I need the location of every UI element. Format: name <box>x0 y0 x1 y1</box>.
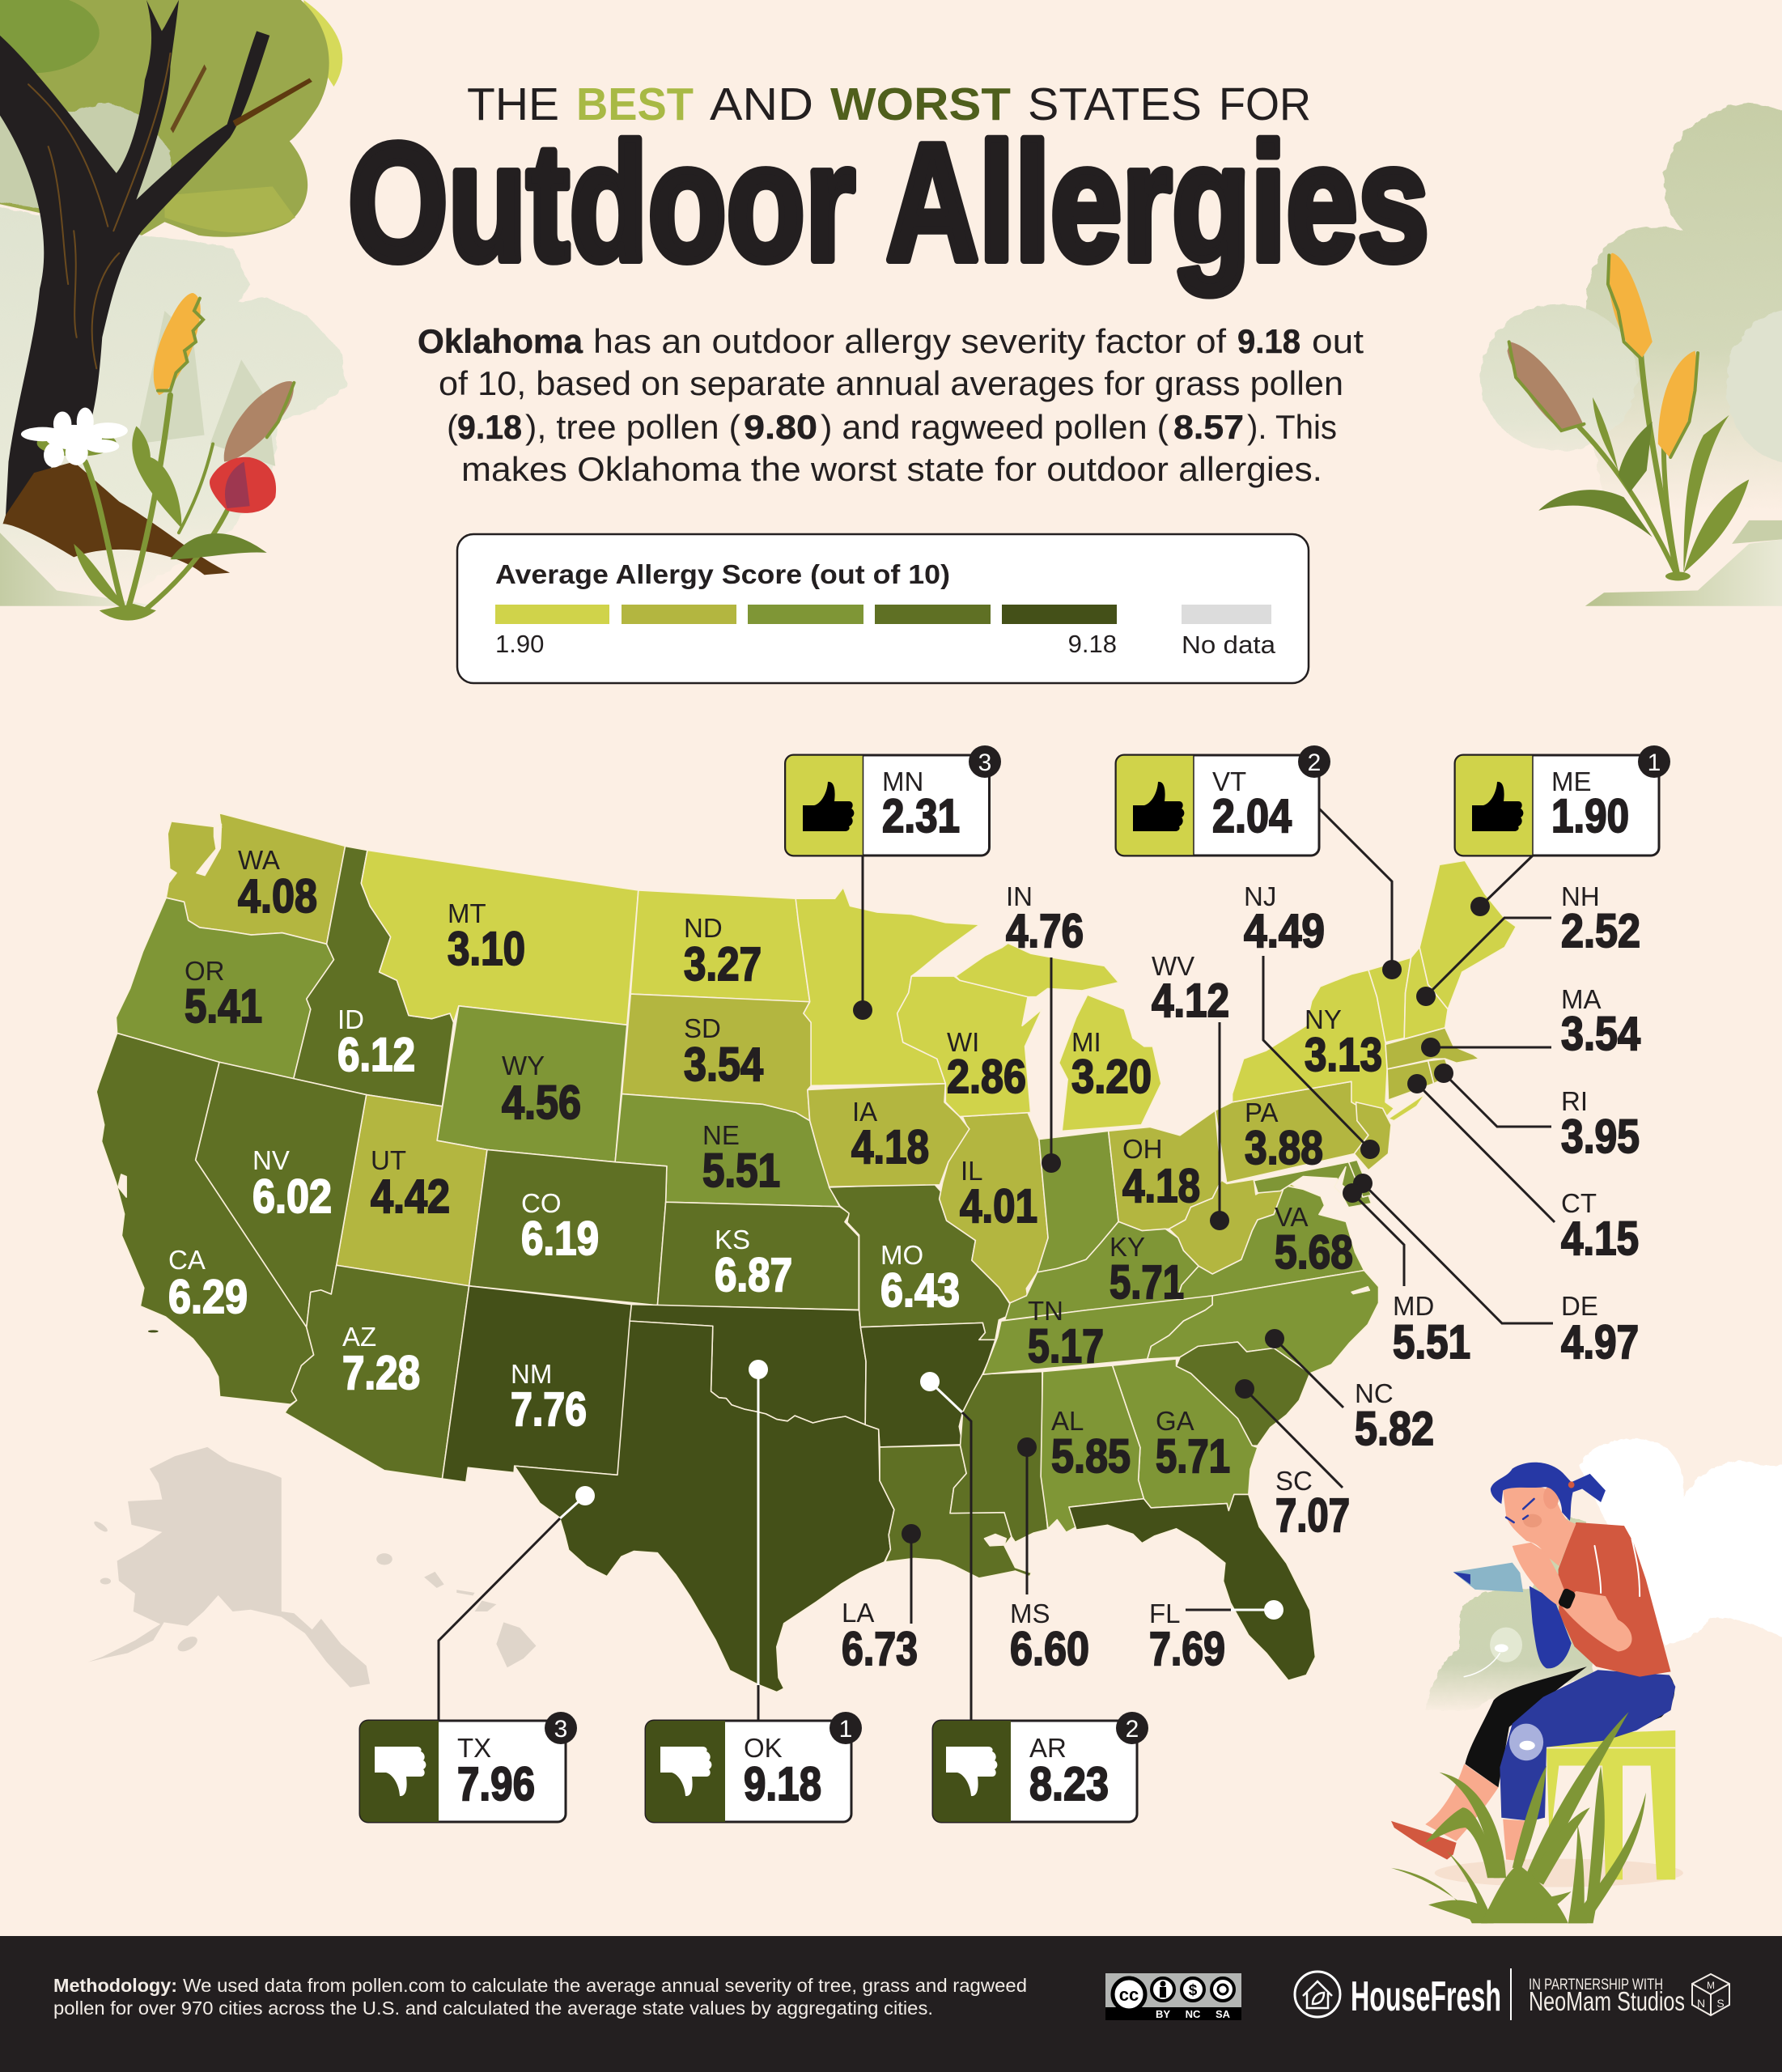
label: WA <box>238 845 317 923</box>
label: MI <box>1071 1027 1152 1103</box>
label: AZ: AZ <box>342 1322 376 1352</box>
connector: SC <box>1235 1379 1343 1488</box>
callout: best 3 MN: 3 <box>978 749 991 776</box>
label: MT: MT <box>448 898 486 928</box>
label: MT: 3.10 <box>448 923 525 975</box>
heading line: the best and worst states for: BEST <box>576 79 694 130</box>
connector: MD <box>1343 1183 1404 1286</box>
illustration: right plant <box>1480 103 1782 606</box>
north central and northeastern states <box>796 860 1516 1208</box>
label: DE: 4.97 <box>1561 1316 1639 1369</box>
label: NM: 7.76 <box>511 1383 587 1436</box>
intro paragraph: makes Oklahoma the worst state for outdoor allergies. <box>461 450 1322 488</box>
label: CA <box>168 1245 248 1323</box>
title: Outdoor Allergies <box>348 109 1429 295</box>
state: IA <box>808 1084 969 1187</box>
state: FL <box>1069 1494 1315 1680</box>
label: NY: NY <box>1305 1004 1342 1034</box>
state: MI <box>956 943 1161 1131</box>
label: CT: CT <box>1561 1188 1597 1218</box>
label: OR: OR <box>185 956 225 986</box>
label: NY: 3.13 <box>1305 1029 1382 1081</box>
label: PA: 3.88 <box>1245 1122 1323 1174</box>
state: WY <box>437 1006 627 1162</box>
label: MI: MI <box>1071 1027 1101 1057</box>
label: NJ: NJ <box>1244 881 1276 911</box>
state: OR <box>116 898 334 1079</box>
callout: best 2 VT <box>1116 745 1330 856</box>
label: NH: NH <box>1561 881 1600 911</box>
heading line: the best and worst states for <box>467 79 1311 130</box>
creative commons badge: NC <box>1186 2008 1201 2020</box>
western states <box>96 813 859 1482</box>
label: IA: IA <box>852 1097 877 1127</box>
connector lines and markers <box>439 809 1555 1721</box>
creative commons badge: BY <box>1156 2008 1170 2020</box>
methodology text: Methodology: <box>53 1975 177 1996</box>
label: CT <box>1561 1188 1639 1265</box>
label: LA <box>842 1598 918 1675</box>
neomam studios credit: IN PARTNERSHIP WITH <box>1529 1976 1663 1993</box>
label: KY <box>1110 1232 1184 1309</box>
state: AZ <box>285 1265 469 1479</box>
callout: worst 1 OK: 9.18 <box>744 1758 821 1811</box>
callout: best 1 ME: ME <box>1551 766 1591 796</box>
state: RI <box>1428 1059 1451 1084</box>
label: SC: SC <box>1275 1466 1313 1496</box>
label: NH <box>1561 881 1640 957</box>
label: ID: 6.12 <box>337 1029 415 1081</box>
heading line: the best and worst states for: WORST <box>830 79 1011 130</box>
legend <box>457 534 1309 683</box>
label: MS: 6.60 <box>1010 1623 1089 1675</box>
connector: TX <box>439 1486 595 1721</box>
state: KS <box>657 1202 859 1310</box>
label: IL: 4.01 <box>960 1180 1037 1233</box>
label: AL: 5.85 <box>1051 1430 1131 1483</box>
label: PA <box>1245 1098 1323 1174</box>
connector: CT <box>1407 1074 1555 1222</box>
label: NJ <box>1244 881 1325 957</box>
callout: worst 3 TX: 3 <box>554 1716 567 1743</box>
southeastern and ohio valley states <box>940 1110 1379 1680</box>
footer bar <box>0 1936 1782 2072</box>
connector: WV <box>1210 1022 1229 1230</box>
label: TN: 5.17 <box>1028 1320 1104 1373</box>
label: RI: 3.95 <box>1561 1110 1640 1163</box>
connector: DE <box>1353 1174 1553 1323</box>
state: VA <box>1177 1186 1364 1301</box>
callout: worst 1 OK: 1 <box>839 1716 852 1743</box>
label: SD <box>684 1013 763 1091</box>
label: NE <box>702 1120 780 1197</box>
callout: best 1 ME: 1.90 <box>1551 790 1629 843</box>
label: LA: 6.73 <box>842 1623 918 1675</box>
intro paragraph: 9.18 <box>457 408 522 446</box>
label: VA: VA <box>1275 1202 1309 1232</box>
label: IL <box>960 1156 1037 1233</box>
illustration: tree and flowers <box>0 0 346 621</box>
legend: 1.90 <box>495 630 544 658</box>
intro paragraph: 8.57 <box>1173 408 1244 446</box>
intro paragraph: 9.18 <box>1237 322 1300 360</box>
label: UT: UT <box>371 1145 406 1175</box>
label: VA <box>1275 1202 1353 1279</box>
label: NJ: 4.49 <box>1244 905 1325 957</box>
callout: best 2 VT: 2.04 <box>1212 790 1292 843</box>
state: NC <box>1148 1271 1379 1374</box>
state: UT <box>337 1095 487 1286</box>
intro paragraph <box>418 322 1364 488</box>
label: IN: 4.76 <box>1006 905 1084 957</box>
label: IL: IL <box>961 1156 983 1186</box>
state: PA <box>1216 1081 1368 1182</box>
label: WV: WV <box>1152 951 1194 981</box>
label: MS: MS <box>1010 1599 1050 1628</box>
label: OR <box>185 956 262 1033</box>
label: ND: 3.27 <box>684 938 762 991</box>
label: UT <box>371 1145 450 1223</box>
label: TN <box>1028 1296 1104 1373</box>
label: NM <box>511 1359 587 1436</box>
state: MD <box>1254 1162 1371 1208</box>
legend: Average Allergy Score (out of 10) <box>495 559 950 589</box>
housefresh logo: HouseFresh <box>1351 1973 1501 2020</box>
label: ND: ND <box>684 913 723 943</box>
neomam studios credit: M <box>1707 1980 1715 1991</box>
state: ME <box>1419 860 1516 1009</box>
connector: ME <box>1470 856 1533 916</box>
label: MT <box>448 898 525 975</box>
intro paragraph: ). This <box>1247 408 1337 446</box>
state: NM <box>442 1286 632 1482</box>
label: WY: WY <box>502 1051 545 1081</box>
heading line: the best and worst states for: AND <box>710 79 813 130</box>
state: NE <box>615 1094 840 1207</box>
label: OR: 5.41 <box>185 980 262 1033</box>
label: WI <box>947 1027 1026 1103</box>
label: WI: WI <box>947 1027 979 1057</box>
label: KS: 6.87 <box>715 1249 792 1301</box>
callout: worst 1 OK: OK <box>744 1733 783 1763</box>
label: WI: 2.86 <box>947 1051 1026 1103</box>
state: WI <box>897 976 1042 1117</box>
label: OH: 4.18 <box>1122 1160 1200 1212</box>
state: WV <box>1169 1178 1299 1274</box>
south central states <box>515 1183 1048 1692</box>
state: ND <box>630 890 810 1002</box>
state: OK <box>630 1305 866 1424</box>
methodology text: We used data from pollen.com to calculate the average annual severity of tree, grass and ragweed <box>183 1975 1027 1996</box>
state: TX <box>515 1321 894 1692</box>
label: NH: 2.52 <box>1561 905 1640 957</box>
state: KY <box>1005 1221 1199 1320</box>
callout: worst 2 AR: AR <box>1029 1733 1067 1763</box>
label: IA: 4.18 <box>851 1121 929 1174</box>
label: MD: MD <box>1393 1291 1434 1321</box>
label: NV: 6.02 <box>252 1170 332 1223</box>
label: RI: RI <box>1561 1086 1588 1116</box>
label: NV <box>252 1145 332 1223</box>
callout: worst 2 AR: 2 <box>1126 1716 1139 1743</box>
label: CT: 4.15 <box>1561 1212 1639 1265</box>
label: CO: CO <box>521 1188 562 1218</box>
state: LA <box>880 1446 1032 1578</box>
legend: 9.18 <box>1068 630 1117 658</box>
state: MO <box>829 1183 1010 1340</box>
intro paragraph: ( <box>447 408 458 446</box>
state: DE <box>1348 1160 1371 1197</box>
label: MA <box>1561 984 1640 1060</box>
state values <box>168 845 1640 1675</box>
callout: worst 2 AR <box>933 1712 1148 1822</box>
legend: No data <box>1182 631 1276 659</box>
connector: MS <box>1017 1437 1037 1594</box>
label: FL <box>1149 1599 1225 1675</box>
state: MS <box>950 1372 1048 1542</box>
state: GA <box>1113 1359 1258 1510</box>
label: AZ: 7.28 <box>342 1347 420 1399</box>
state: IN <box>1037 1131 1118 1272</box>
creative commons badge <box>1105 1973 1241 2020</box>
label: OH <box>1122 1134 1200 1212</box>
label: KY: 5.71 <box>1110 1256 1184 1309</box>
callout: best 1 ME: 1 <box>1648 749 1661 776</box>
label: MO: 6.43 <box>880 1264 960 1317</box>
label: WY: 4.56 <box>502 1076 581 1129</box>
label: SC: 7.07 <box>1275 1489 1350 1542</box>
label: MA: MA <box>1561 984 1601 1014</box>
connector: NH <box>1416 918 1551 1006</box>
creative commons badge: SA <box>1216 2008 1231 2020</box>
label: WA: WA <box>238 845 280 875</box>
intro paragraph: has an outdoor allergy severity factor of <box>593 322 1226 360</box>
neomam studios credit: S <box>1716 1997 1725 2010</box>
label: SD: 3.54 <box>684 1038 763 1091</box>
state: VT <box>1368 957 1411 1042</box>
callout: worst 3 TX <box>360 1712 577 1822</box>
connector: AR <box>920 1372 971 1721</box>
state: CA <box>96 1034 314 1404</box>
callout: best 2 VT: VT <box>1212 766 1246 796</box>
label: TN: TN <box>1028 1296 1063 1326</box>
label: WV <box>1152 951 1229 1027</box>
label: GA: GA <box>1156 1406 1194 1436</box>
connector: OK <box>749 1360 768 1721</box>
state: MA <box>1385 1028 1479 1069</box>
state: NJ <box>1354 1102 1391 1170</box>
label: AZ <box>342 1322 420 1399</box>
label: AL <box>1051 1406 1131 1483</box>
connector: VT <box>1319 809 1402 979</box>
label: NC <box>1355 1378 1434 1455</box>
label: ID: ID <box>337 1004 364 1034</box>
us map <box>96 813 1516 1692</box>
connector: IN <box>1042 957 1061 1173</box>
label: LA: LA <box>842 1598 874 1628</box>
methodology text: pollen for over 970 cities across the U.S. and calculated the average state values by aggregating cities. <box>53 1998 933 2019</box>
heading line: the best and worst states for: FOR <box>1219 79 1311 130</box>
label: WY <box>502 1051 581 1129</box>
label: KY: KY <box>1110 1232 1145 1262</box>
label: VA: 5.68 <box>1275 1226 1353 1279</box>
puget sound and san francisco bay cutouts <box>118 824 221 1332</box>
callout: worst 3 TX: TX <box>457 1733 491 1763</box>
label: ID <box>337 1004 415 1081</box>
label: MA: 3.54 <box>1561 1008 1640 1060</box>
intro paragraph: ) and ragweed pollen ( <box>821 408 1169 446</box>
label: MD: 5.51 <box>1393 1316 1470 1369</box>
label: GA: 5.71 <box>1156 1430 1230 1483</box>
label: FL: FL <box>1149 1599 1181 1628</box>
state: NH <box>1404 947 1448 1039</box>
label: NC: 5.82 <box>1355 1403 1434 1455</box>
label: NE: NE <box>702 1120 740 1150</box>
label: WV: 4.12 <box>1152 974 1229 1027</box>
callout: best 1 ME <box>1455 745 1670 856</box>
label: KS <box>715 1225 792 1301</box>
state: NY <box>1233 970 1425 1121</box>
state: OH <box>1109 1110 1221 1231</box>
label: ND <box>684 913 762 991</box>
creative commons badge: cc <box>1119 1985 1139 2005</box>
heading line: the best and worst states for: THE <box>467 79 559 130</box>
connector: NC <box>1265 1329 1343 1408</box>
state: CT <box>1387 1061 1434 1100</box>
callout: worst 3 TX: 7.96 <box>457 1758 535 1811</box>
neomam studios credit: N <box>1697 1997 1705 2010</box>
label: MS <box>1010 1599 1089 1675</box>
state: SC <box>1177 1342 1310 1446</box>
state: MN <box>796 887 979 1085</box>
intro paragraph: of 10, based on separate annual averages for grass pollen <box>439 364 1343 402</box>
callout: worst 1 OK <box>646 1712 862 1822</box>
state: NV <box>196 1062 367 1327</box>
label: RI <box>1561 1086 1640 1163</box>
label: UT: 4.42 <box>371 1170 450 1223</box>
state: AR <box>860 1323 995 1447</box>
label: NM: NM <box>511 1359 552 1389</box>
connector: LA <box>902 1524 921 1624</box>
state: TN <box>983 1296 1212 1374</box>
connector: MA <box>1421 1038 1551 1057</box>
label: GA <box>1156 1406 1230 1483</box>
state: MT <box>361 851 639 1025</box>
label: CO: 6.19 <box>521 1212 599 1265</box>
heading line: the best and worst states for: STATES <box>1028 79 1202 130</box>
label: DE <box>1561 1291 1639 1369</box>
state: SD <box>622 994 811 1121</box>
label: MI: 3.20 <box>1071 1051 1152 1103</box>
label: NV: NV <box>252 1145 290 1175</box>
label: AL: AL <box>1051 1406 1084 1436</box>
label: NY <box>1305 1004 1382 1081</box>
label: FL: 7.69 <box>1149 1623 1225 1675</box>
callout: best 2 VT: 2 <box>1308 749 1321 776</box>
label: WA: 4.08 <box>238 870 317 923</box>
label: CO <box>521 1188 599 1265</box>
illustration: person sneezing on stool <box>1391 1439 1782 1923</box>
label: PA: PA <box>1245 1098 1279 1127</box>
label: CA: 6.29 <box>168 1271 248 1323</box>
state: ID <box>294 846 453 1106</box>
callout: worst 2 AR: 8.23 <box>1029 1758 1109 1811</box>
label: NC: NC <box>1355 1378 1394 1408</box>
methodology text <box>53 1975 1027 2019</box>
state: IL <box>940 1113 1048 1303</box>
label: OH: OH <box>1122 1134 1162 1164</box>
label: IA <box>851 1097 929 1174</box>
connector: NJ <box>1263 956 1380 1159</box>
label: KS: KS <box>715 1225 750 1255</box>
state: WA <box>166 813 346 944</box>
label: CA: CA <box>168 1245 206 1275</box>
callout: best 3 MN: MN <box>882 766 923 796</box>
creative commons badge: $ <box>1189 1982 1198 1999</box>
intro paragraph: ), tree pollen ( <box>525 408 740 446</box>
callout: best 3 MN <box>785 745 1001 856</box>
callout: best 3 MN: 2.31 <box>882 790 960 843</box>
intro paragraph: out <box>1312 322 1364 360</box>
state: AL <box>1041 1365 1143 1532</box>
neomam studios credit: NeoMam Studios <box>1529 1986 1685 2016</box>
footer divider <box>1510 1968 1512 2020</box>
intro paragraph: 9.80 <box>744 408 817 446</box>
label: MO <box>880 1240 960 1317</box>
housefresh logo <box>1295 1972 1501 2020</box>
label: IN <box>1006 881 1084 957</box>
alaska and hawaii <box>88 1447 536 1688</box>
intro paragraph: Oklahoma <box>418 322 583 360</box>
label: DE: DE <box>1561 1291 1598 1321</box>
state: CO <box>469 1149 667 1306</box>
label: SD: SD <box>684 1013 721 1043</box>
connector: RI <box>1434 1064 1551 1127</box>
label: MO: MO <box>880 1240 923 1270</box>
label: MD <box>1393 1291 1470 1369</box>
connector: MN <box>853 856 872 1020</box>
connector: FL <box>1186 1600 1283 1620</box>
label: NE: 5.51 <box>702 1144 780 1197</box>
label: SC <box>1275 1466 1350 1542</box>
label: IN: IN <box>1006 881 1033 911</box>
